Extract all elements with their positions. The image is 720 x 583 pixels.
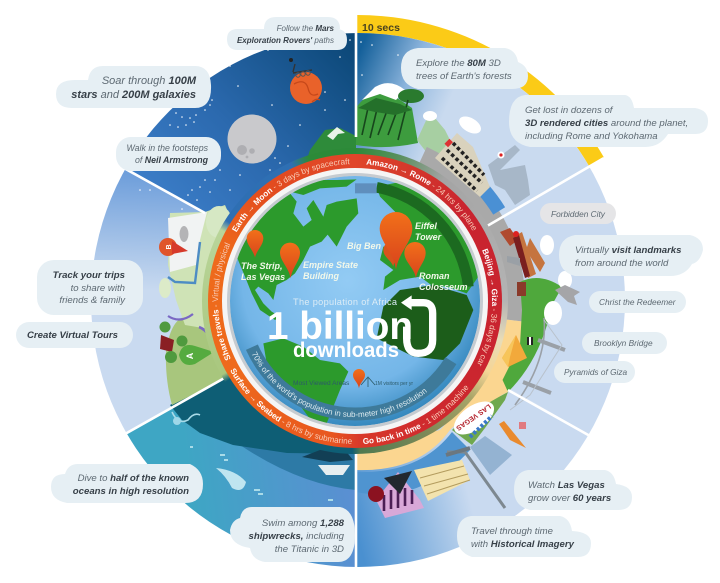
inner resolution band <box>246 344 456 420</box>
callout: shipwrecks: Swim among 1,288 <box>262 518 345 529</box>
callout: visit landmarks <box>559 235 703 276</box>
callout: Neil Armstrong <box>116 137 221 171</box>
legend: most viewed areas <box>293 377 413 387</box>
headline: population of Africa: The population of Africa <box>293 297 398 307</box>
callout: shipwrecks <box>230 507 355 562</box>
icon: Las Vegas tower and towers <box>446 436 512 508</box>
map: Africa <box>377 285 473 360</box>
callout: track your trips <box>37 260 143 315</box>
callout: 3D cities: including Rome and Yokohama <box>525 131 658 142</box>
pin labels: Eiffel <box>415 221 437 231</box>
icon: Brooklyn Bridge <box>510 318 565 410</box>
terrain band around ring <box>202 148 508 454</box>
resolution band text: 70% of the world's population in sub-meter high resolution <box>252 351 427 418</box>
icon: red house and trees <box>160 322 188 363</box>
icon: Las Vegas hotels <box>368 460 470 518</box>
pins <box>247 212 426 388</box>
pin labels: Empire State <box>303 260 358 270</box>
map: South America <box>263 338 348 423</box>
icon: pyramids of Giza <box>502 335 533 367</box>
callout: Brooklyn Bridge: Brooklyn Bridge <box>594 338 653 348</box>
callout: 3D cities: 3D rendered cities around the planet, <box>525 118 688 129</box>
icon: Forbidden City <box>500 228 554 278</box>
stars <box>140 40 398 209</box>
pin labels: Building <box>303 271 339 281</box>
callout: stars and galaxies: Soar through 100M <box>102 75 197 87</box>
map: dark rim <box>377 187 468 287</box>
icon: red pin B <box>159 238 188 256</box>
callout: virtual tours <box>16 322 133 348</box>
land: ocean depths <box>170 374 356 490</box>
map: Arctic and Greenland <box>293 179 358 247</box>
globe rim <box>222 168 488 434</box>
callout: Las Vegas <box>514 470 632 510</box>
legend: most viewed areas: 1M visitors per yr <box>375 381 413 387</box>
icon: wave and whale <box>172 412 333 500</box>
ring text: Earth → Moon - 3 days by spacecraft <box>232 158 350 232</box>
callout: Mars rovers <box>227 17 347 50</box>
headline: downloads: downloads <box>293 339 399 362</box>
icon: Las Vegas sign: LAS VEGAS <box>454 402 492 431</box>
callout: Mars rovers: Follow the Mars <box>277 24 335 33</box>
callout: Las Vegas: grow over 60 years <box>528 493 611 504</box>
callout: shipwrecks: shipwrecks, including <box>249 531 345 542</box>
headline: 1 billion: 1 billion <box>267 305 413 348</box>
callout: Neil Armstrong: of Neil Armstrong <box>135 155 209 165</box>
pin labels: Colosseum <box>419 282 468 292</box>
callout: track your trips: Track your trips <box>53 270 125 281</box>
callout: historical imagery: with Historical Imagery <box>471 539 575 550</box>
ring text: Share travels - Virtual / physical <box>212 242 230 360</box>
pin labels: The Strip, <box>241 261 283 271</box>
icon: Christ the Redeemer <box>555 285 580 305</box>
coloured journey ring <box>208 154 502 448</box>
callout: oceans: Dive to half of the known <box>78 473 189 484</box>
callout: visit landmarks: Virtually visit landmarks <box>575 245 681 256</box>
arrow: u-turn <box>401 295 433 353</box>
icon: Yokohama towers <box>488 145 530 205</box>
callout: 3D trees: trees of Earth's forests <box>416 71 512 82</box>
icon: Roman Colosseum <box>435 133 490 197</box>
pin labels: Las Vegas <box>241 272 285 282</box>
band: grey road, blue water and sand <box>185 131 525 471</box>
globe <box>230 176 480 426</box>
callout: track your trips: to share with <box>71 283 125 294</box>
callout: Christ the Redeemer: Christ the Redeemer <box>599 297 677 307</box>
callout: Christ the Redeemer <box>589 291 686 313</box>
callout: oceans: oceans in high resolution <box>73 486 189 497</box>
callout: Pyramids of Giza: Pyramids of Giza <box>564 367 628 377</box>
callout: shipwrecks: the Titanic in 3D <box>275 544 344 555</box>
icon: green pin A: A <box>185 352 195 359</box>
callout: stars and galaxies <box>56 66 211 108</box>
callout: oceans <box>51 464 203 503</box>
callout: Neil Armstrong: Walk in the footsteps <box>126 143 209 153</box>
pin labels: Big Ben <box>347 241 382 251</box>
callout: 3D trees <box>401 48 528 89</box>
legend: most viewed areas: Most Viewed Areas <box>293 380 350 387</box>
yellow time arc <box>356 15 604 166</box>
sector dividers <box>122 15 604 567</box>
pin labels <box>241 221 468 292</box>
land: right green hills and sand <box>356 271 572 494</box>
pin labels: Roman <box>419 271 450 281</box>
icon: Las Vegas sign <box>448 395 500 441</box>
callout: historical imagery: Travel through time <box>471 526 553 537</box>
icon: red pin B: B <box>166 244 173 250</box>
ring text: Amazon → Rome - 24 hrs by plane <box>366 159 476 230</box>
wheel sectors <box>92 33 625 567</box>
map: square patch <box>355 183 377 193</box>
callout: 3D trees: Explore the 80M 3D <box>416 58 501 69</box>
callout: visit landmarks: from around the world <box>575 258 669 269</box>
map: Eurasia <box>377 180 478 293</box>
callout: Brooklyn Bridge <box>582 332 667 354</box>
land: top hills and forest <box>305 83 485 200</box>
callout: Mars rovers: Exploration Rovers' paths <box>237 36 334 45</box>
callout: track your trips: friends & family <box>59 295 126 306</box>
callout: 3D cities <box>509 95 708 147</box>
land: left hills <box>159 205 236 405</box>
icon: pencil hotel and flag <box>499 421 526 448</box>
illustrated background wheel <box>92 15 625 567</box>
ring text: Surface → Seabed - 8 hrs by submarine <box>230 368 352 444</box>
callout: virtual tours: Create Virtual Tours <box>27 330 118 341</box>
ring text: Beijing → Giza - 36 days by car <box>478 248 498 366</box>
callout: historical imagery <box>457 516 591 557</box>
pin labels: Tower <box>415 232 442 242</box>
map: North America <box>238 194 328 320</box>
icon: mars with rover <box>289 58 322 104</box>
ring text <box>212 158 498 444</box>
ring text: Go back in time - 1 time machine <box>363 386 468 444</box>
callout: Pyramids of Giza <box>554 361 635 383</box>
callout: Las Vegas: Watch Las Vegas <box>528 480 605 491</box>
icon: green pin A <box>179 345 214 365</box>
callout: Forbidden City: Forbidden City <box>551 209 606 219</box>
label: 10 secs: 10 secs <box>362 22 400 34</box>
callout: Forbidden City <box>540 203 616 224</box>
callout: 3D cities: Get lost in dozens of <box>525 105 614 116</box>
icon: moon <box>228 114 276 164</box>
callout: stars and galaxies: stars and 200M galaxies <box>71 89 196 101</box>
